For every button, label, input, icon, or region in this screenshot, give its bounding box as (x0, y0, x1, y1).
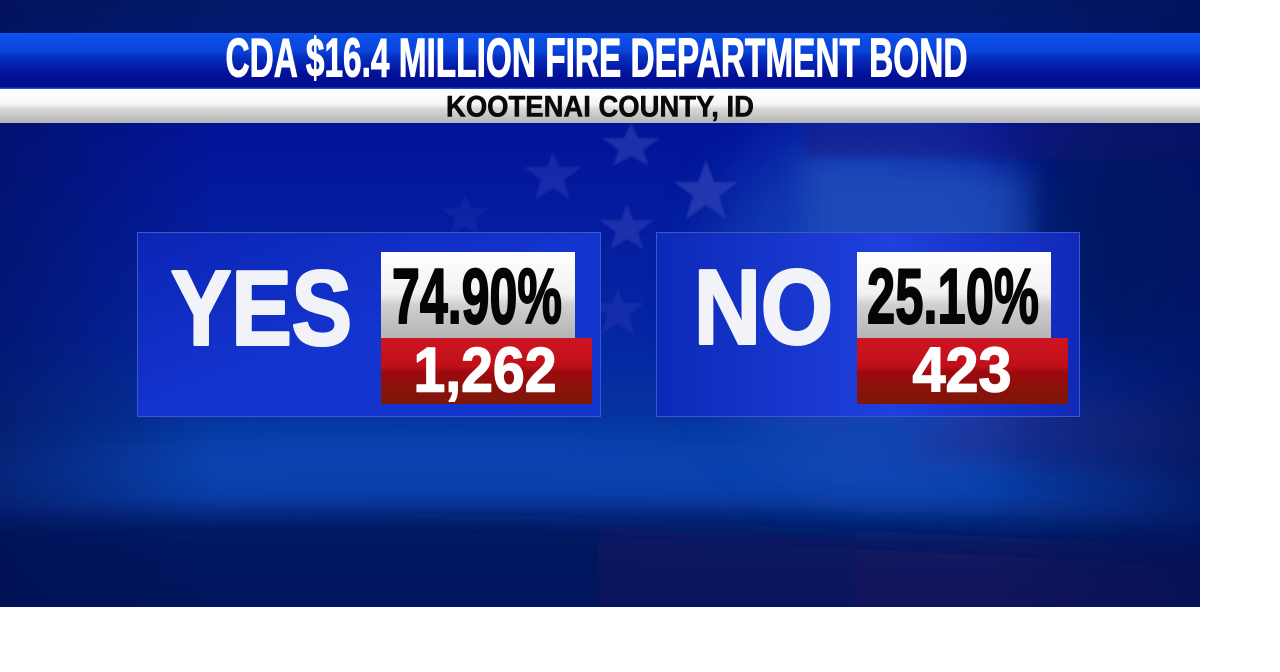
no percentage box: 25.10% (867, 252, 1039, 340)
location banner (0, 89, 1200, 124)
yes vote count box: 1,262 (414, 336, 556, 406)
no percentage box (857, 252, 1051, 340)
yes label: YES (171, 250, 352, 368)
yes percentage box: 74.90% (392, 252, 562, 340)
panel: yes results (138, 232, 600, 416)
title banner (0, 28, 1200, 89)
no label: NO (694, 248, 833, 366)
no vote count box: 423 (912, 336, 1012, 406)
yes percentage box (381, 252, 575, 340)
location text: KOOTENAI COUNTY, ID (446, 90, 754, 124)
icons: flag stars (440, 123, 738, 335)
no vote count box (857, 336, 1068, 406)
panel: no results (656, 232, 1080, 416)
